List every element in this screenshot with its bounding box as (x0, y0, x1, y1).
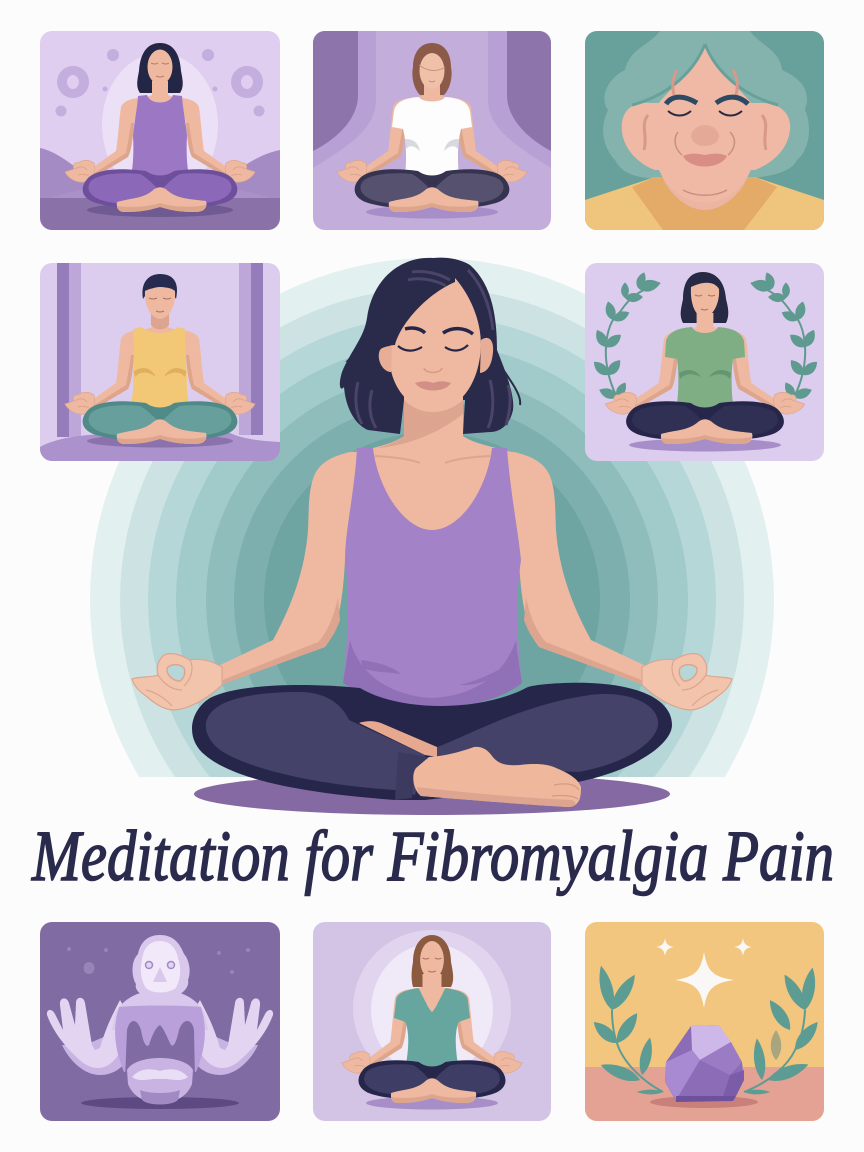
left finger loop (167, 665, 185, 681)
right finger lines (672, 660, 718, 706)
right arm shadow (524, 598, 644, 685)
collar lines (375, 456, 490, 463)
neck and chin (661, 174, 749, 210)
left hand (47, 998, 132, 1068)
seated figure (337, 43, 527, 212)
legs (626, 401, 784, 444)
face (145, 287, 175, 319)
hair (412, 43, 452, 95)
hair back (137, 43, 183, 93)
right laurel (750, 271, 820, 401)
hair (412, 935, 453, 987)
mat under main figure (194, 773, 670, 815)
lips (683, 154, 727, 166)
seated figure (342, 935, 522, 1103)
bowl base (140, 1090, 180, 1104)
teal tee (394, 988, 470, 1075)
panel: crystal and laurel (585, 922, 824, 1121)
facial lines (422, 958, 442, 972)
mat (366, 207, 498, 218)
hair back (681, 272, 728, 323)
eyebrows (666, 97, 748, 104)
nose (424, 368, 442, 372)
crystal base (665, 1025, 744, 1101)
outer halo (353, 930, 511, 1086)
background (313, 922, 551, 1121)
arms (605, 313, 805, 414)
shoulders (112, 990, 208, 1030)
yellow tank (130, 327, 190, 415)
hair blob (603, 31, 809, 180)
left laurel (591, 271, 661, 401)
left arm band (62, 1030, 130, 1075)
toe lines (552, 784, 579, 799)
big star (675, 952, 734, 1008)
panel: man in yellow (40, 263, 280, 461)
decorative rings (56, 49, 264, 116)
seated figure (65, 43, 255, 212)
crystal dark facet (722, 1070, 744, 1100)
face (691, 283, 719, 317)
background (40, 31, 280, 230)
legs (355, 169, 509, 212)
left trouser light (206, 692, 425, 795)
under-foot skin (359, 721, 437, 757)
crystal mid facet (665, 1050, 700, 1100)
yellow top (585, 177, 824, 230)
mat (87, 434, 233, 448)
face (658, 48, 751, 176)
bowl (127, 1058, 193, 1103)
arms (337, 81, 527, 182)
facial lines (695, 295, 715, 310)
cheek lines (675, 132, 734, 195)
lips (415, 381, 451, 390)
floor (40, 198, 280, 230)
shadow mat (87, 206, 233, 217)
hair wisps (632, 44, 778, 105)
mat (366, 1096, 498, 1110)
tank top (132, 95, 188, 176)
head outer (132, 935, 190, 1000)
left mudra hand (132, 654, 222, 710)
floor (40, 433, 280, 461)
bowl band (132, 1069, 188, 1080)
main meditating woman (132, 258, 732, 807)
small right star (734, 938, 752, 956)
legs (359, 1060, 505, 1103)
panel: woman in white (313, 31, 551, 230)
background (40, 263, 280, 461)
background (585, 31, 824, 230)
specks (67, 947, 250, 974)
nose (691, 125, 719, 146)
crystal (665, 1025, 744, 1102)
left hill (40, 148, 74, 170)
purple chest (115, 1006, 205, 1072)
dark trousers (192, 683, 672, 800)
dark centre drips (125, 1021, 195, 1080)
closed eyes (668, 111, 742, 116)
left arm shadow (220, 598, 340, 685)
face (389, 278, 481, 412)
left arm (216, 452, 360, 685)
neck (422, 974, 442, 1012)
arms (65, 81, 255, 182)
right trouser light (437, 694, 658, 772)
background (585, 263, 824, 461)
panel: woman in teal (313, 922, 551, 1121)
facial lines (149, 298, 171, 312)
arms (342, 972, 522, 1073)
tee folds (405, 139, 459, 151)
back hair (340, 258, 513, 434)
crystal light facet (691, 1025, 731, 1060)
face (420, 941, 444, 979)
white tee (392, 97, 472, 182)
short hair (142, 274, 177, 299)
panel: pale pain figure (40, 922, 280, 1121)
right laurel (744, 966, 822, 1094)
stray hair right (498, 362, 520, 405)
facial lines (151, 63, 169, 77)
face (420, 53, 444, 85)
legs (83, 169, 237, 212)
face (148, 50, 172, 84)
background (585, 922, 824, 1121)
hair highlights (356, 270, 510, 428)
eyebrows (405, 328, 473, 334)
shirt folds (679, 370, 731, 379)
seated figure (605, 272, 805, 444)
inner halo (371, 944, 493, 1076)
right hand (188, 998, 273, 1068)
yellow collar (632, 177, 777, 230)
wrinkle marks (644, 70, 766, 150)
nose (153, 967, 167, 982)
closed eyes (398, 345, 468, 351)
right finger loop (679, 665, 697, 681)
purple tank top (343, 448, 522, 707)
floor shadow (81, 1097, 239, 1109)
head inner (141, 941, 180, 992)
crystal right facet (700, 1042, 742, 1075)
halo (102, 57, 218, 170)
small left star (656, 938, 674, 956)
background (313, 31, 551, 230)
foot shadow (417, 787, 576, 807)
background (40, 922, 280, 1121)
cuff (395, 752, 428, 800)
panel: woman in purple (40, 31, 280, 230)
right arm (504, 452, 648, 685)
panel: close-up older woman face (585, 31, 824, 230)
mat (629, 438, 781, 452)
right mudra hand (642, 654, 732, 710)
green tee (665, 327, 745, 415)
pink ground (585, 1067, 824, 1121)
shirt folds (134, 368, 186, 377)
concentric teal halo (90, 258, 774, 777)
faint olive leaf (771, 1030, 781, 1060)
foot (413, 747, 581, 807)
neck shadow (378, 400, 463, 448)
left pillars (57, 263, 69, 437)
tank hem and folds (343, 640, 522, 707)
neck and shoulders (326, 395, 538, 560)
arms (65, 313, 255, 414)
right arm band (190, 1030, 258, 1075)
left laurel (590, 964, 663, 1094)
crystal shadow (650, 1096, 758, 1108)
right curtain (488, 31, 551, 168)
right pillars (239, 263, 251, 435)
facial lines (419, 65, 445, 82)
panel: woman in green with laurel (585, 263, 824, 461)
ears and cheeks (622, 103, 790, 170)
neck shadow (151, 313, 169, 330)
right hill (246, 150, 280, 170)
ears (379, 338, 493, 373)
crystal bottom (676, 1096, 735, 1102)
eyes (146, 962, 152, 968)
legs (83, 401, 237, 444)
left finger lines (146, 660, 192, 706)
hair front strands (345, 272, 455, 362)
left curtain (313, 31, 376, 168)
seated figure (65, 274, 255, 444)
